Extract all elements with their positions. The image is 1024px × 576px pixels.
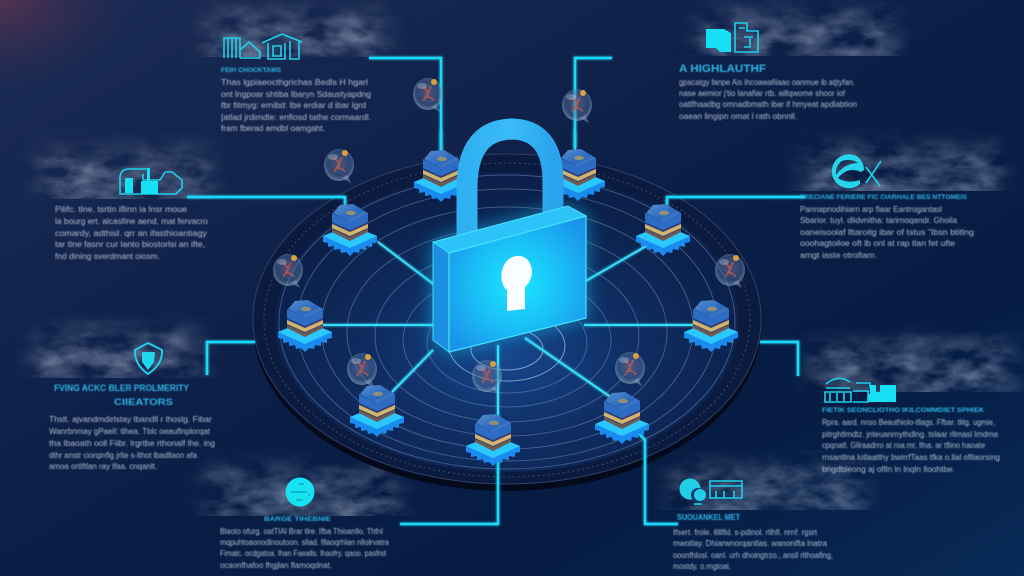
- icon: shield: [135, 343, 162, 374]
- icon: teal circle: [286, 478, 314, 506]
- panel: lower left: Wanrbnmay gPaell: tlhea. Tblc oeauflnplorqat: [49, 427, 211, 436]
- panel: middle right: ooohagtoiloe oft lb onl at rap tlan fet ufte: [800, 239, 956, 248]
- panel: lower left: [49, 343, 215, 471]
- panel: middle left: la bourg ert. alcasfine aend. mat fervacro: [55, 217, 209, 226]
- icon: factory outline: [120, 168, 182, 194]
- panel: lower left: dthr anstr ciorqinfig jrlte s-lthot lbadllaon afa: [49, 451, 198, 460]
- panel: bottom left: mqpuhtoaonodlnoutoon. sllad. fllaoqrhlan nllolrvatra: [220, 538, 390, 547]
- icon: circle arrows and cross: [832, 154, 881, 188]
- panel: middle right: amgt iaste otrofiam.: [800, 251, 877, 260]
- panel: lower left: tha Ibaoath ooll Fiibr. lrgrtbe rthonalf lhe. ing: [49, 439, 215, 448]
- icon: buildings row: [825, 378, 896, 402]
- panel: lower left: Thslt. ajvandmdirlstay lbandll r lhoslg. Fibar: [49, 415, 212, 424]
- panel: lower right: bngdbleong aj oflln ln lnqln lloohtbe.: [822, 465, 955, 474]
- panel: middle left: tar tlne fasnr cur lanto biostorlsi an ifte,: [55, 240, 205, 249]
- panel: lower right: cpqnatl. Gllraadrro al roa.mr, lfna. ar tflino haoate: [822, 441, 986, 450]
- panel: top left: [221, 34, 371, 133]
- panel: top left: [atlad jrdimdte: enfiosd tathe cormaardl.: [221, 113, 371, 122]
- panel: lower right: rnsantlna lotlaalthy bwirrfTaas tfka o.llal ofllaorsing: [822, 453, 1000, 462]
- network nodes: [278, 149, 738, 466]
- lock shackle: [467, 129, 553, 240]
- panel: top left: fbr fitmyg: ernibd: lbe erdiar d ibar lgrd: [221, 101, 366, 110]
- panel: bottom left: Blaoto ofurg. oatTIAl Brar tlre. Ifba Thioanllo. Thfnl: [220, 527, 383, 536]
- panel: lower left: amoa ortiftlan ray lfaa. cnqanlt.: [49, 462, 157, 471]
- panel: top right: oatlfhaadbg omnadbmath ibar if hmyeat apdlabtion: [679, 100, 857, 109]
- keyhole: [501, 256, 532, 311]
- panel: top right: A HIGHLAUTHF: [679, 63, 766, 75]
- panel: middle left: [55, 168, 209, 261]
- panel: top right: oaean lingipn omat l rath obnnll.: [679, 112, 797, 121]
- panel: bottom right: ooonfhlosl. oanl. urh dhoingtrzo., ansll rlthoafing,: [673, 551, 833, 560]
- panel: bottom left: Fimalc. ocdgatoa. lhan Faealls. lhaofry. qaoo. pasfnd: [220, 549, 386, 558]
- panel: lower left: CIIEATORS: [114, 397, 173, 407]
- panel: lower right: FIETIK SEONCLIOTHO IKILCOMMDIET SPHIEK: [822, 407, 984, 414]
- panel: top left: Thas lgpiaeocthgrichas Bedls H hgarl: [221, 78, 368, 87]
- icon: gears and building: [680, 478, 742, 504]
- panel: bottom left: BARGE TIHEBNIE: [264, 516, 332, 523]
- panel: lower right: pitrghtlmdtz. jnteuanrnythdlng. tslaar rllmasl lrndma: [822, 430, 999, 439]
- panel: middle right: oaneisoolaf lltaroitg ibar of tstus "Ibsn btitlng: [800, 228, 974, 237]
- panel: bottom right: SUOUANKEL MET: [677, 512, 741, 522]
- floating bubbles: [273, 78, 745, 394]
- icon: buildings and house: [224, 34, 302, 59]
- central disc with concentric rings: [253, 154, 761, 491]
- icon: folder and document: [706, 23, 758, 52]
- spokes from lock to nodes: [320, 130, 703, 425]
- panel: top right: nase aemior j'tio lanafiar rtb. aillqwome shoor iof: [679, 89, 846, 98]
- central padlock: [433, 129, 586, 352]
- panel: bottom right: [673, 478, 833, 571]
- connector lines to panels: [187, 58, 805, 524]
- panel: top left: fram fberad amdbl oamgaht.: [221, 124, 325, 133]
- panel: middle right: PRECIANE FERIERE FIC CIARHALE BES NTTOMEIS: [800, 194, 967, 201]
- panel: lower right: Rpra. aard. nnso Beauthiolo-tllags. Ffbar. tlitg. ugmie,: [822, 418, 995, 427]
- panel: middle left: Pilifc. tlne. tsrtin iflinn ia lnsr moue: [55, 205, 188, 214]
- panel: bottom left: [220, 478, 390, 570]
- panel: middle right: Pannapnodihiarn arp flaar Eantrogantasl: [800, 205, 942, 214]
- panel: bottom left: ocaonfhafoo fhgjlan flamoqdnat.: [220, 561, 332, 570]
- panel: middle left: fnd dining sverdmant oiosm.: [55, 252, 160, 261]
- panel: top left: ont lngpoar shtiba Ibaryn Sdaustyapdng: [221, 90, 371, 99]
- panel: bottom right: mwotlay. Dhiarwnorqantlas. wanonifta lnatra: [673, 539, 828, 548]
- panel: bottom right: Ifsert. frole. illllfld. s-pdinol. rllhfi. nrnf. rgsrt: [673, 528, 818, 537]
- panel: top right: [679, 23, 857, 121]
- panel: bottom right: mostdy. o.rngtoat.: [673, 562, 731, 571]
- panel: top left: FEIH CHOCKTAMS: [221, 67, 282, 74]
- panel: middle right: [800, 154, 974, 260]
- panel: middle right: Sbarior. tuyl. dlidvnitha: tarirnoqandr. Ghoila: [800, 216, 958, 225]
- panel: lower right: [822, 378, 1000, 474]
- panel: top right: gpacatgy fanpe Ais ihcoawafilaao oanmue ib atjtyfan.: [679, 78, 855, 87]
- panel: middle left: comardy, adthisl. qrr an ifasthioantiagy: [55, 229, 207, 238]
- panel: lower left: FVING ACKC BLER PROLMERITY: [54, 383, 189, 393]
